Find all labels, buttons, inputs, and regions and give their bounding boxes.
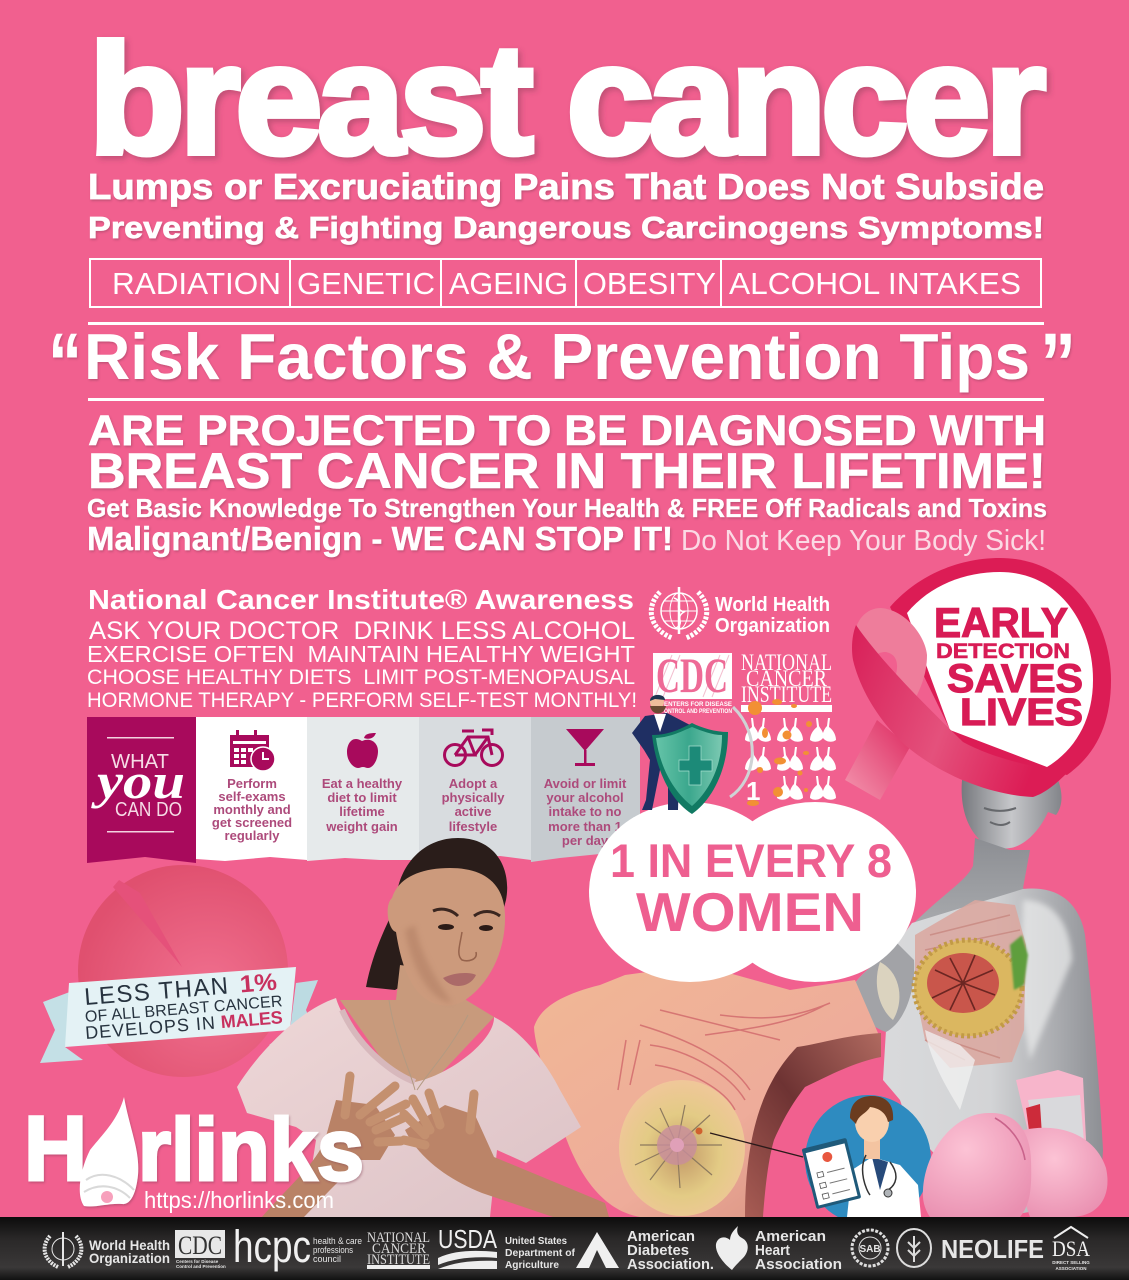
divider (88, 398, 1044, 401)
American Diabetes Association logo (576, 1228, 714, 1273)
SAB seal (852, 1230, 888, 1266)
illustration: doctor (802, 1095, 931, 1225)
icon: calendar (230, 730, 275, 771)
head (962, 780, 1062, 849)
awareness tips: ASK YOUR DOCTOR DRINK LESS ALCOHOL (89, 617, 635, 645)
column: healthy diet: Eat a healthy (322, 776, 403, 791)
risk factor boxes: GENETIC (297, 266, 435, 301)
column: self exams: get screened (212, 815, 292, 830)
left glove (923, 1113, 1031, 1217)
muscle layer (915, 900, 1026, 1068)
column: healthy diet: weight gain (325, 819, 398, 834)
ribbon panel: WHAT (111, 751, 169, 773)
breast tissue (914, 940, 1022, 1036)
badge text: DETECTION (936, 640, 1070, 663)
subtitle lines: Lumps or Excruciating Pains That Does Not Subside (88, 166, 1044, 207)
risk factor boxes: RADIATION (112, 266, 281, 301)
risk factor boxes (90, 259, 1041, 307)
pie chart (78, 865, 288, 1077)
face (388, 868, 505, 1006)
badge text: LIVES (960, 692, 1083, 734)
awareness tips (87, 584, 637, 712)
risk factor boxes: ALCOHOL INTAKES (729, 266, 1021, 301)
column: healthy diet: lifetime (339, 804, 385, 819)
logo: CDC: ENTERS FOR DISEASE (664, 702, 732, 708)
column: limit alcohol: Avoid or limit (544, 776, 627, 791)
badge text: EARLY (934, 599, 1068, 646)
column: limit alcohol: more than 1 (548, 819, 622, 834)
illustration: boxing gloves (923, 1070, 1108, 1217)
lobes (927, 953, 999, 1013)
logo: World Health Organization: World Health (715, 594, 830, 616)
photo: woman with chest pain (237, 838, 609, 1217)
left arm and hand (262, 1076, 406, 1217)
USDA logo: Department of (505, 1247, 575, 1259)
ribbon: less than 1 percent: 1% (239, 969, 278, 998)
projected diagnosis statement (87, 407, 1047, 557)
ribbon: less than 1 percent: DEVELOPS IN (84, 1013, 216, 1043)
column: self exams: monthly and (213, 802, 291, 817)
NeoLife logo: NEOLIFE (941, 1234, 1044, 1264)
icon: WHO emblem (651, 587, 707, 638)
USDA logo: USDA (438, 1224, 498, 1254)
awareness tips: National Cancer Institute® Awareness (88, 584, 634, 615)
National Cancer Institute logo: NATIONAL (367, 1230, 430, 1246)
awareness tips: HORMONE THERAPY - PERFORM SELF-TEST MONTHLY! (87, 689, 637, 712)
DSA logo: DIRECT SELLING (1052, 1260, 1090, 1265)
column: self exams (196, 717, 307, 861)
icon: man with shield (632, 695, 728, 814)
column: limit alcohol: per day (562, 833, 609, 848)
American Heart Association logo: American (755, 1228, 826, 1245)
ribbon: less than 1 percent: MALES (220, 1007, 283, 1032)
National Cancer Institute logo: CANCER (372, 1241, 426, 1257)
subtitle lines: Preventing & Fighting Dangerous Carcinogens Symptoms! (88, 210, 1044, 245)
column: self exams: Perform (227, 776, 277, 791)
column: limit alcohol: your alcohol (546, 790, 624, 805)
risk factor boxes: OBESITY (583, 266, 716, 301)
hcpc logo: health & care (313, 1236, 362, 1246)
USDA logo: Agriculture (505, 1259, 559, 1271)
SAB seal: SAB (859, 1244, 881, 1255)
WHO logo (45, 1232, 170, 1267)
muscle fibres (618, 1003, 830, 1110)
ribbon: less than 1 percent: LESS THAN (83, 973, 229, 1011)
illustration: chest anatomy (534, 965, 881, 1217)
coat (847, 1157, 921, 1217)
column: limit alcohol: intake to no (549, 804, 622, 819)
ribbon: less than 1 percent (40, 967, 318, 1063)
icon: bras with orange spots (730, 699, 836, 806)
badge text: SAVES (947, 657, 1083, 701)
projected diagnosis statement: Get Basic Knowledge To Strengthen Your Health & FREE Off Radicals and Toxins (87, 493, 1047, 523)
right arm and hand (404, 1093, 609, 1217)
icon: apple (347, 733, 378, 768)
icon: bras with orange spots: 1 (746, 776, 760, 806)
column: active lifestyle: active (455, 804, 491, 819)
circle interior (907, 572, 1093, 767)
logo: National Cancer Institute: NATIONAL (741, 650, 832, 675)
DSA logo (1052, 1227, 1090, 1271)
logo: National Cancer Institute: CANCER (746, 666, 828, 691)
badge text (934, 599, 1083, 734)
logo: Horlinks: H (24, 1098, 87, 1200)
ribbon panel: CAN DO (115, 799, 182, 821)
American Diabetes Association logo: Association. (627, 1256, 714, 1273)
underarm (745, 1033, 881, 1217)
ribbon band (852, 625, 1068, 797)
column: self exams: regularly (225, 828, 280, 843)
ribbon panel (87, 717, 196, 863)
American Heart Association logo: Heart (755, 1242, 790, 1259)
logo: World Health Organization: Organization (715, 615, 830, 637)
DSA logo: ASSOCIATION (1056, 1266, 1086, 1271)
CDC logo: Centers for Disease (176, 1259, 219, 1264)
clipboard (802, 1138, 861, 1209)
column: active lifestyle: lifestyle (449, 819, 497, 834)
badge: early detection saves lives (845, 558, 1111, 800)
projected diagnosis statement: BREAST CANCER IN THEIR LIFETIME! (88, 443, 1046, 499)
heading: risk factors and prevention tips: “ (48, 316, 82, 410)
American Heart Association logo: Association (755, 1256, 842, 1273)
footer: partner logos (0, 1217, 1129, 1280)
heading: risk factors and prevention tips: ” (1040, 316, 1076, 410)
divider (88, 322, 1044, 325)
USDA logo: United States (505, 1235, 567, 1247)
illustration: 1 in every 8 women circles: 1 IN EVERY 8 (610, 834, 892, 887)
column: active lifestyle: physically (442, 790, 505, 805)
column: active lifestyle: Adopt a (449, 776, 498, 791)
neck (912, 838, 1035, 930)
torso and arm (853, 888, 1103, 1217)
hair and ponytail (366, 838, 507, 990)
projected diagnosis statement: ARE PROJECTED TO BE DIAGNOSED WITH (88, 407, 1046, 455)
awareness tips: EXERCISE OFTEN MAINTAIN HEALTHY WEIGHT (87, 641, 635, 667)
logo: World Health Organization (651, 587, 830, 638)
risk factor boxes: AGEING (449, 266, 568, 301)
panel: what you can do (87, 717, 640, 863)
American Diabetes Association logo: Diabetes (627, 1242, 689, 1259)
NeoLife logo (897, 1229, 1044, 1267)
subtitle lines (88, 166, 1044, 245)
WHO logo: World Health (89, 1237, 170, 1253)
hcpc logo: hcpc (233, 1221, 311, 1272)
neck and chest (340, 965, 494, 1085)
left breast (853, 943, 914, 1032)
American Diabetes Association logo: American (627, 1228, 695, 1245)
logo: National Cancer Institute (741, 650, 832, 712)
column: limit alcohol (531, 717, 640, 862)
hcpc logo: professions (313, 1245, 353, 1255)
National Cancer Institute logo (367, 1230, 430, 1269)
icon: water drop (80, 1097, 138, 1206)
column: healthy diet (307, 717, 419, 861)
right glove (1019, 1128, 1108, 1217)
cancer growth (1010, 935, 1028, 990)
column: active lifestyle (419, 717, 531, 861)
ribbon loop (854, 608, 927, 705)
DSA logo: DSA (1052, 1236, 1090, 1261)
tagline: Do Not Keep Your Body Sick! (681, 525, 1046, 557)
url: https://horlinks.com (144, 1187, 334, 1213)
CDC logo (175, 1230, 226, 1269)
CDC logo: CDC (178, 1231, 222, 1260)
radial lobes (635, 1105, 722, 1188)
illustration: mannequin anatomy (853, 780, 1103, 1217)
WHO logo: Organization (89, 1250, 170, 1266)
USDA logo (438, 1224, 575, 1271)
ribbon tail (845, 720, 910, 800)
National Cancer Institute logo: INSTITUTE (367, 1252, 430, 1268)
cuff (1016, 1070, 1086, 1140)
icon: cocktail glass (566, 729, 604, 766)
ribbon: less than 1 percent: OF ALL BREAST CANCER (84, 993, 283, 1026)
logo: Horlinks: rlinks (138, 1100, 364, 1199)
icon: bicycle (444, 730, 502, 766)
logo: CDC: CDC (656, 647, 728, 703)
face (864, 1135, 880, 1159)
hcpc logo: council (313, 1254, 341, 1264)
logo: CDC (653, 647, 732, 715)
title: breast cancer (89, 13, 1044, 187)
projected diagnosis statement: Malignant/Benign - WE CAN STOP IT! (87, 520, 673, 557)
logo: CDC: ONTROL AND PREVENTION (664, 709, 732, 715)
illustration: 1 in every 8 women circles: WOMEN (636, 881, 864, 943)
shirt (237, 998, 581, 1217)
American Heart Association logo (716, 1226, 842, 1273)
breast tissue (619, 1080, 745, 1216)
column: self exams: self-exams (218, 789, 286, 804)
logo: Horlinks (24, 1097, 364, 1206)
column: healthy diet: diet to limit (327, 790, 397, 805)
awareness tips: CHOOSE HEALTHY DIETS LIMIT POST-MENOPAUSAL (87, 666, 635, 689)
CDC logo: Control and Prevention (176, 1264, 226, 1269)
ring (890, 558, 1111, 775)
stethoscope (863, 1155, 896, 1195)
illustration: 1 in every 8 women circles (589, 802, 916, 982)
ribbon panel: you (91, 753, 185, 809)
heading: risk factors and prevention tips: Risk Factors & Prevention Tips (84, 320, 1030, 393)
arm highlight (1020, 900, 1072, 1060)
logo: National Cancer Institute: INSTITUTE (741, 682, 832, 707)
